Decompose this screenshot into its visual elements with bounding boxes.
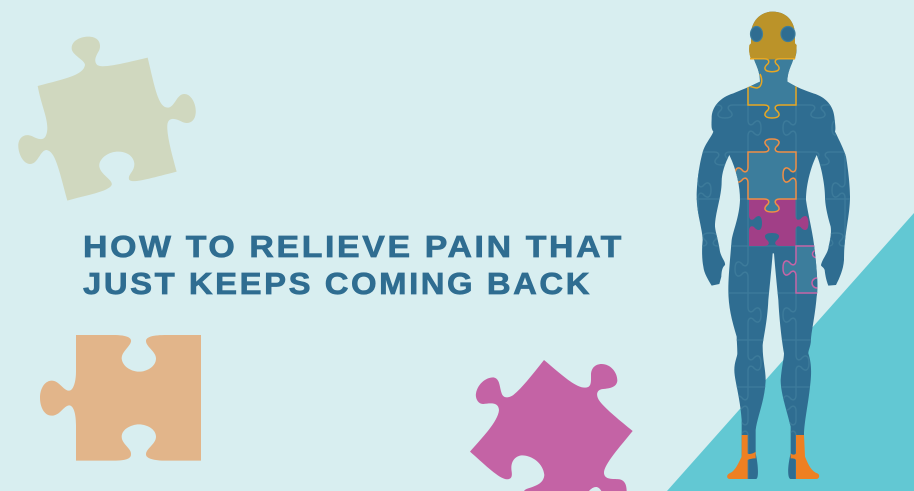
puzzle piece: tan orange [40, 335, 201, 461]
thigh piece side notches [811, 250, 818, 289]
right ear notch [781, 26, 795, 42]
body silhouette [696, 12, 850, 479]
jigsaw grid lines [696, 86, 850, 479]
teal diagonal corner [667, 213, 914, 491]
title line 2: JUST KEEPS COMING BACK [83, 266, 592, 301]
puzzle piece: pink [470, 360, 633, 491]
title [83, 229, 624, 301]
human body figure [696, 12, 850, 479]
right foot [791, 435, 819, 479]
left foot [727, 435, 756, 479]
jigsaw pieces clipped to the body [696, 60, 850, 479]
neck and chest piece fill [748, 58, 796, 118]
left ear notch [750, 26, 762, 42]
head piece [749, 12, 797, 59]
puzzle piece: sage green [18, 37, 196, 201]
magenta pain piece [749, 199, 808, 246]
head piece lower edge and tab [750, 59, 795, 72]
thigh piece with pink outline [783, 246, 820, 293]
abdomen piece with orange outline [735, 139, 796, 212]
title line 1: HOW TO RELIEVE PAIN THAT [83, 229, 624, 264]
chest piece gold outline [748, 74, 796, 118]
